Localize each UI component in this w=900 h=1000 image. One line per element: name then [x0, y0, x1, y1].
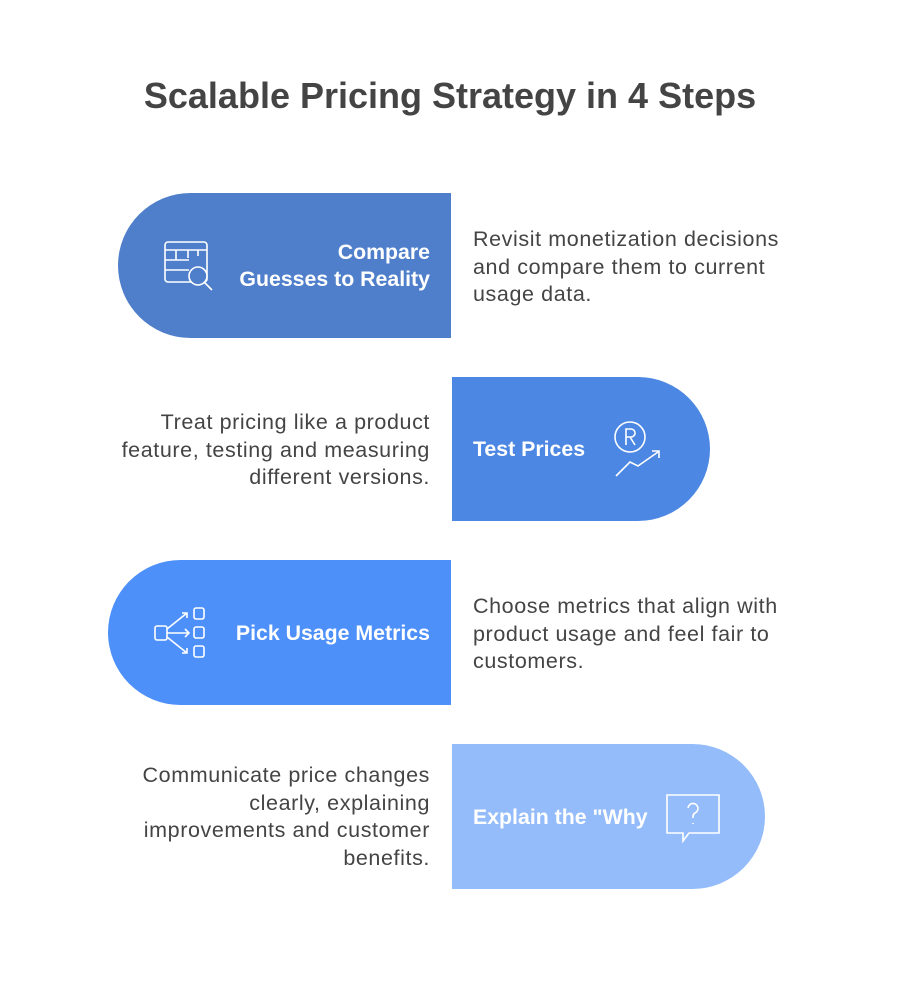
panel: step 2 [452, 377, 710, 521]
text: step 1 description [473, 227, 779, 306]
panel: step 4 [452, 744, 765, 889]
text: step 2 description: Treat pricing like a product [161, 410, 430, 434]
text: step 4 description: clearly, explaining [249, 790, 430, 814]
panel: step 3 [108, 560, 451, 705]
icon: branching metrics [154, 607, 205, 658]
heading: compare guesses: Compare [338, 240, 430, 264]
text: step 3 description [473, 594, 778, 673]
text: step 2 description [122, 410, 430, 489]
text: step 3 description: Choose metrics that align with [473, 594, 778, 618]
text: step 1 description: and compare them to current [473, 254, 765, 278]
text: step 4 description [143, 763, 430, 870]
text: step 1 description: Revisit monetization decisions [473, 227, 779, 251]
text: step 4 description: benefits. [343, 846, 430, 870]
heading: explain the why: Explain the "Why [473, 805, 648, 829]
text: step 4 description: Communicate price changes [143, 763, 430, 787]
heading: compare guesses [239, 240, 430, 291]
icon: question bubble [666, 794, 720, 844]
text: step 2 description: feature, testing and measuring [122, 438, 430, 462]
heading: compare guesses: Guesses to Reality [239, 267, 430, 291]
text: step 1 description: usage data. [473, 282, 592, 306]
title: Scalable Pricing Strategy in 4 Steps [144, 75, 756, 116]
text: step 3 description: product usage and feel fair to [473, 622, 770, 646]
icon: price trend [614, 421, 660, 477]
text: step 3 description: customers. [473, 649, 584, 673]
heading: test prices: Test Prices [473, 437, 585, 461]
heading: pick usage metrics: Pick Usage Metrics [236, 621, 430, 645]
text: step 2 description: different versions. [249, 465, 430, 489]
text: step 4 description: improvements and customer [144, 818, 430, 842]
icon: table search [164, 241, 212, 291]
panel: step 1 [118, 193, 451, 338]
